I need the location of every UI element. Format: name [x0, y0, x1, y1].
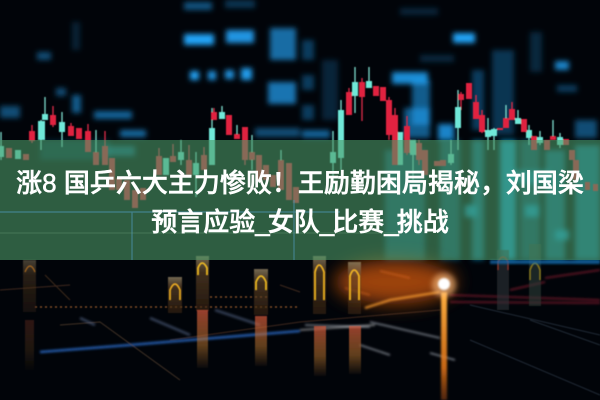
orange glow [335, 260, 455, 304]
lower reflection streak [131, 260, 133, 312]
circuit floor with light trails [0, 270, 600, 395]
title text: 预言应验_女队_比赛_挑战 [151, 207, 449, 237]
title text [16, 168, 584, 237]
pillar 5 [313, 256, 326, 376]
red candle bodies [6, 82, 598, 208]
blurred screen behind band [40, 140, 600, 260]
blue strip under band [490, 260, 600, 264]
sun flare with beam [432, 273, 456, 400]
pillar 3 [196, 256, 209, 368]
green title band [0, 140, 600, 260]
candlestick chart [0, 67, 598, 208]
pillar 6 [348, 262, 361, 374]
pillar 2 [168, 277, 182, 313]
pillar 7 [497, 250, 509, 390]
pillar 1 [23, 260, 36, 370]
teal wicks [1, 67, 560, 197]
pillar 4 [254, 269, 268, 366]
glass pillars [23, 244, 541, 398]
blurred blue data screen [0, 0, 597, 140]
pillar 8 [529, 244, 541, 398]
title text: 涨8 国乒六大主力惨败！王励勤困局揭秘，刘国梁 [16, 168, 584, 198]
teal candle bodies [0, 81, 563, 175]
red wicks [32, 78, 512, 175]
grid lines on band [0, 200, 340, 260]
